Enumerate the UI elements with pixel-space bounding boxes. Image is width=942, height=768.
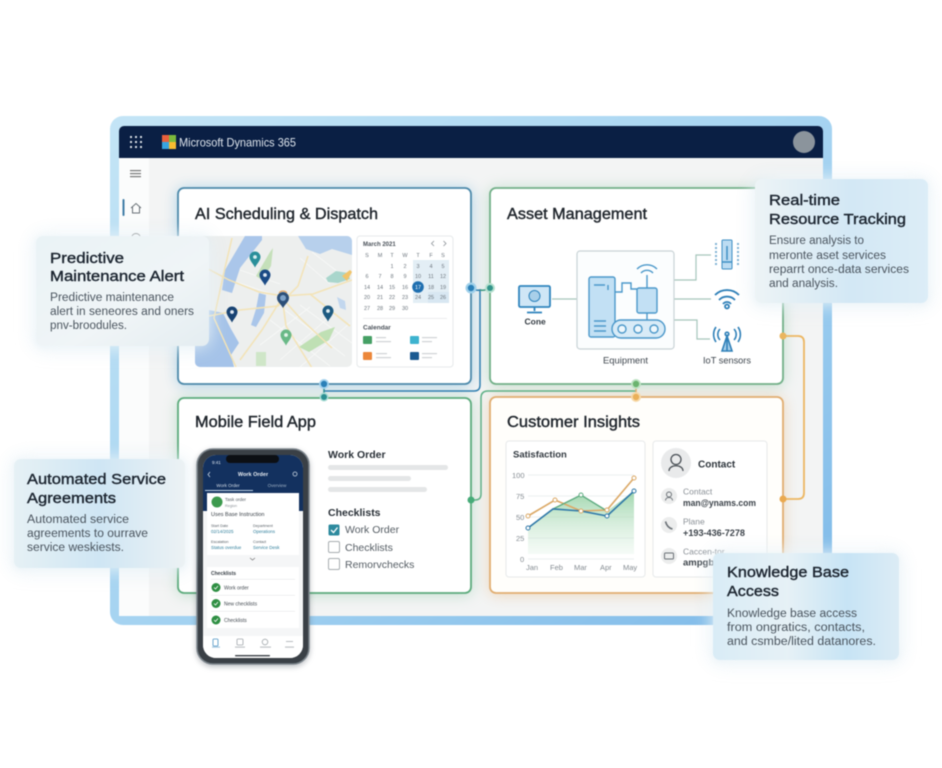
calendar card: 18 [428, 285, 434, 291]
calendar card: 5 [441, 264, 445, 270]
work order card: 02/14/2025 [211, 529, 234, 534]
panel: Mobile Field App [178, 398, 471, 593]
callout: Real-time Resource Tracking: reparrt once-data services [769, 264, 909, 276]
callout: Automated Service Agreements: Automated Service [27, 471, 166, 488]
phone tab bar [203, 636, 303, 658]
satisfaction chart [506, 441, 645, 577]
calendar card: 3 [416, 264, 420, 270]
top navigation bar [119, 126, 823, 158]
satisfaction chart: Feb [550, 563, 563, 572]
map pin: green [280, 330, 292, 346]
callout: Automated Service Agreements [14, 459, 185, 568]
user avatar [793, 131, 815, 153]
heading: Customer Insights [507, 414, 640, 431]
calendar card: 12 [440, 274, 446, 280]
satisfaction chart: May [623, 563, 637, 572]
calendar card: 6 [365, 274, 369, 280]
work order card: Status overdue [211, 545, 242, 550]
dashboard window frame [110, 116, 832, 625]
work order card: Start Date [211, 524, 228, 528]
phone header [203, 455, 303, 511]
map pin: navy west [226, 306, 238, 322]
contact card: Caccen-tor [683, 546, 725, 556]
calendar card: 30 [402, 306, 408, 312]
panel: AI Scheduling & Dispatch [178, 188, 471, 384]
icon: IoT antenna [714, 327, 740, 351]
avatar [661, 448, 691, 478]
icon: sensor device [716, 240, 738, 269]
checklist card: New checklists [224, 602, 258, 608]
work order card: Region [225, 504, 237, 508]
work order card: Uses Base Instruction [211, 512, 264, 518]
callout: Knowledge Base Access: and csmbe/lited datanores. [727, 636, 876, 648]
callout: Knowledge Base Access: Knowledge base access [727, 608, 857, 620]
checked item: Work Order [345, 524, 400, 536]
callout: Predictive Maintenance Alert: alert in seneores and oners [50, 306, 194, 318]
calendar card: 15 [389, 285, 395, 291]
calendar card: 14 [364, 285, 370, 291]
callout: Automated Service Agreements: agreements to ourrave [27, 528, 148, 540]
calendar card: 26 [440, 295, 446, 301]
callout: Predictive Maintenance Alert: Predictive [50, 250, 124, 267]
icon: Microsoft logo [162, 135, 176, 149]
panel: Customer Insights [490, 397, 783, 593]
map pin: teal [250, 252, 260, 268]
work order card: Operations [253, 529, 276, 534]
work order block: Work Order [328, 449, 386, 461]
label: IoT sensors: IoT sensors [703, 356, 751, 366]
work order block [328, 449, 448, 492]
map pin: dispatch cluster [277, 291, 289, 308]
calendar card: M [378, 253, 383, 259]
checklist block: Checklists [328, 507, 381, 519]
heading: Asset Management [507, 206, 648, 223]
satisfaction chart: 50 [516, 513, 524, 522]
callout: Real-time Resource Tracking [755, 179, 928, 303]
checklist card [207, 567, 299, 628]
contact card: Plane [683, 516, 705, 526]
contact card: Contact [698, 460, 736, 470]
checklist card: Checklists [211, 571, 236, 577]
contact card [653, 441, 767, 577]
callout: Real-time Resource Tracking: and analysis. [769, 278, 838, 290]
work order card: Contact [253, 540, 267, 544]
satisfaction chart: 0 [520, 555, 524, 564]
callout: Real-time Resource Tracking: Real-time [769, 192, 840, 209]
calendar card: 4 [429, 264, 433, 270]
calendar card: T [390, 253, 394, 259]
heading: AI Scheduling & Dispatch [195, 206, 378, 223]
calendar card: 7 [378, 274, 382, 280]
icon: app grid [130, 136, 142, 148]
heading: Mobile Field App [195, 414, 316, 431]
sidebar [119, 158, 149, 616]
calendar card: 11 [428, 274, 434, 280]
callout: Real-time Resource Tracking: meronte aset services [769, 250, 886, 262]
contact card: Contact [683, 486, 713, 496]
icon: monitor [519, 286, 550, 312]
satisfaction chart: Apr [600, 563, 612, 572]
label: Cone: Cone [524, 316, 546, 326]
work order card: Department [253, 524, 274, 528]
calendar card: 16 [402, 285, 408, 291]
map pin: navy east [322, 306, 334, 322]
callout: Knowledge Base Access [713, 553, 899, 660]
connector lines [552, 255, 711, 339]
work order card: Escalation [211, 540, 229, 544]
callout: Predictive Maintenance Alert: pnv-broodules. [50, 320, 127, 332]
selected date: 17 [415, 285, 421, 291]
checklist card: Work order [224, 586, 249, 592]
callout: Knowledge Base Access: from ongratics, contacts, [727, 622, 865, 634]
label: Equipment: Equipment [603, 356, 648, 366]
connector nodes [319, 282, 786, 504]
work order card: Service Desk [253, 545, 280, 550]
connectors between modules [319, 282, 804, 504]
month title: March 2021 [363, 242, 396, 248]
calendar card: T [416, 253, 420, 259]
calendar card: S [365, 253, 369, 259]
calendar card: 21 [377, 295, 383, 301]
phone header: Work Order [216, 483, 240, 488]
calendar card: 2 [403, 264, 407, 270]
satisfaction chart: 25 [516, 534, 524, 543]
checklist block [328, 507, 414, 571]
calendar card: 29 [389, 306, 395, 312]
satisfaction chart: 75 [516, 492, 524, 501]
phone header: Work Order [238, 472, 269, 478]
callout: Predictive Maintenance Alert: Maintenance Alert [50, 268, 185, 285]
callout: Automated Service Agreements: Agreements [27, 490, 116, 507]
unchecked item: Checklists [345, 542, 393, 554]
phone header: Overview [268, 483, 287, 488]
calendar card: 9 [403, 274, 407, 280]
map [195, 236, 352, 368]
checklist card: Checklists [224, 618, 247, 624]
calendar card: 1 [390, 264, 394, 270]
calendar card: 25 [428, 295, 434, 301]
calendar card: 24 [415, 295, 421, 301]
equipment box [577, 251, 674, 349]
contact card: +193-436-7278 [683, 528, 745, 539]
satisfaction chart: Satisfaction [513, 450, 567, 460]
unchecked item: Remorvchecks [345, 559, 414, 571]
product name: Microsoft Dynamics 365 [179, 136, 296, 150]
calendar card: 23 [402, 295, 408, 301]
satisfaction chart: Jan [526, 563, 538, 572]
callout: Real-time Resource Tracking: Resource Tracking [769, 211, 906, 228]
satisfaction chart: Mar [574, 563, 587, 572]
calendar card: 14 [377, 285, 383, 291]
callout: Knowledge Base Access: Access [727, 583, 779, 600]
contact card: man@ynams.com [683, 498, 756, 509]
calendar card: 27 [364, 306, 370, 312]
calendar card: 22 [389, 295, 395, 301]
icon: wifi [715, 290, 739, 308]
satisfaction chart: 100 [512, 471, 525, 480]
calendar card: 19 [440, 285, 446, 291]
work order card: Task order [225, 497, 247, 502]
calendar card: 20 [364, 295, 370, 301]
callout: Predictive Maintenance Alert [36, 236, 209, 346]
phone header: 9:41 [212, 460, 221, 465]
phone mockup [197, 449, 309, 664]
calendar legend: Calendar [363, 324, 391, 332]
callout: Real-time Resource Tracking: Ensure analysis to [769, 235, 864, 247]
callout: Automated Service Agreements: service weskiests. [27, 542, 124, 554]
work order card [207, 493, 299, 560]
calendar card: 28 [377, 306, 383, 312]
map pin: navy north [260, 270, 270, 286]
contact card: ampgbe [683, 558, 719, 568]
callout: Predictive Maintenance Alert: Predictive maintenance [50, 292, 174, 304]
callout: Automated Service Agreements: Automated service [27, 514, 129, 526]
panel: Asset Management [490, 188, 783, 384]
calendar card: F [429, 253, 433, 259]
calendar card [357, 236, 453, 367]
calendar card: W [402, 253, 408, 259]
calendar card: S [441, 253, 445, 259]
calendar card: 10 [415, 274, 421, 280]
callout: Knowledge Base Access: Knowledge Base [727, 564, 849, 581]
icon: equipment machine [589, 265, 665, 338]
calendar card: 8 [390, 274, 394, 280]
